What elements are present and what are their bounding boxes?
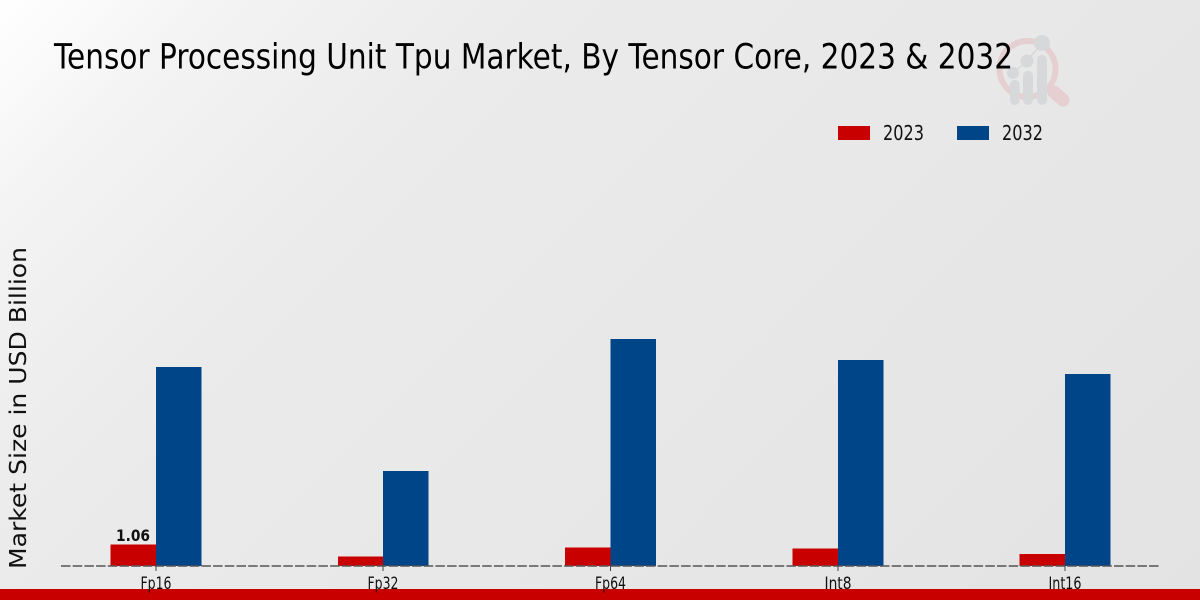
legend	[838, 121, 1043, 145]
legend label 2032: 2032	[1002, 121, 1043, 145]
legend swatch 2023	[838, 126, 870, 140]
footer bar	[0, 589, 1200, 600]
tick marks	[156, 566, 1065, 571]
x axis labels: Int8	[824, 574, 852, 593]
x axis labels: Int16	[1048, 574, 1082, 593]
y axis title: Market Size in USD Billion	[4, 247, 32, 569]
bar chart	[61, 339, 1159, 593]
x axis labels	[140, 574, 1082, 593]
bars: Fp16	[110, 367, 202, 566]
watermark logo icon	[1000, 35, 1063, 105]
x axis labels: Fp32	[368, 574, 398, 593]
title: Tensor Processing Unit Tpu Market, By Tensor Core, 2023 & 2032	[53, 38, 1013, 78]
bars: Fp32	[338, 471, 428, 566]
x axis labels: Fp16	[140, 574, 172, 593]
bars: Int16	[1020, 374, 1110, 566]
bars: Fp64	[565, 339, 656, 566]
x axis labels: Fp64	[595, 574, 626, 593]
legend swatch 2032	[957, 126, 989, 140]
baseline axis	[61, 565, 1159, 567]
bars: Int8	[792, 360, 884, 566]
data label 1.06: 1.06	[116, 526, 150, 545]
legend label 2023: 2023	[883, 121, 924, 145]
